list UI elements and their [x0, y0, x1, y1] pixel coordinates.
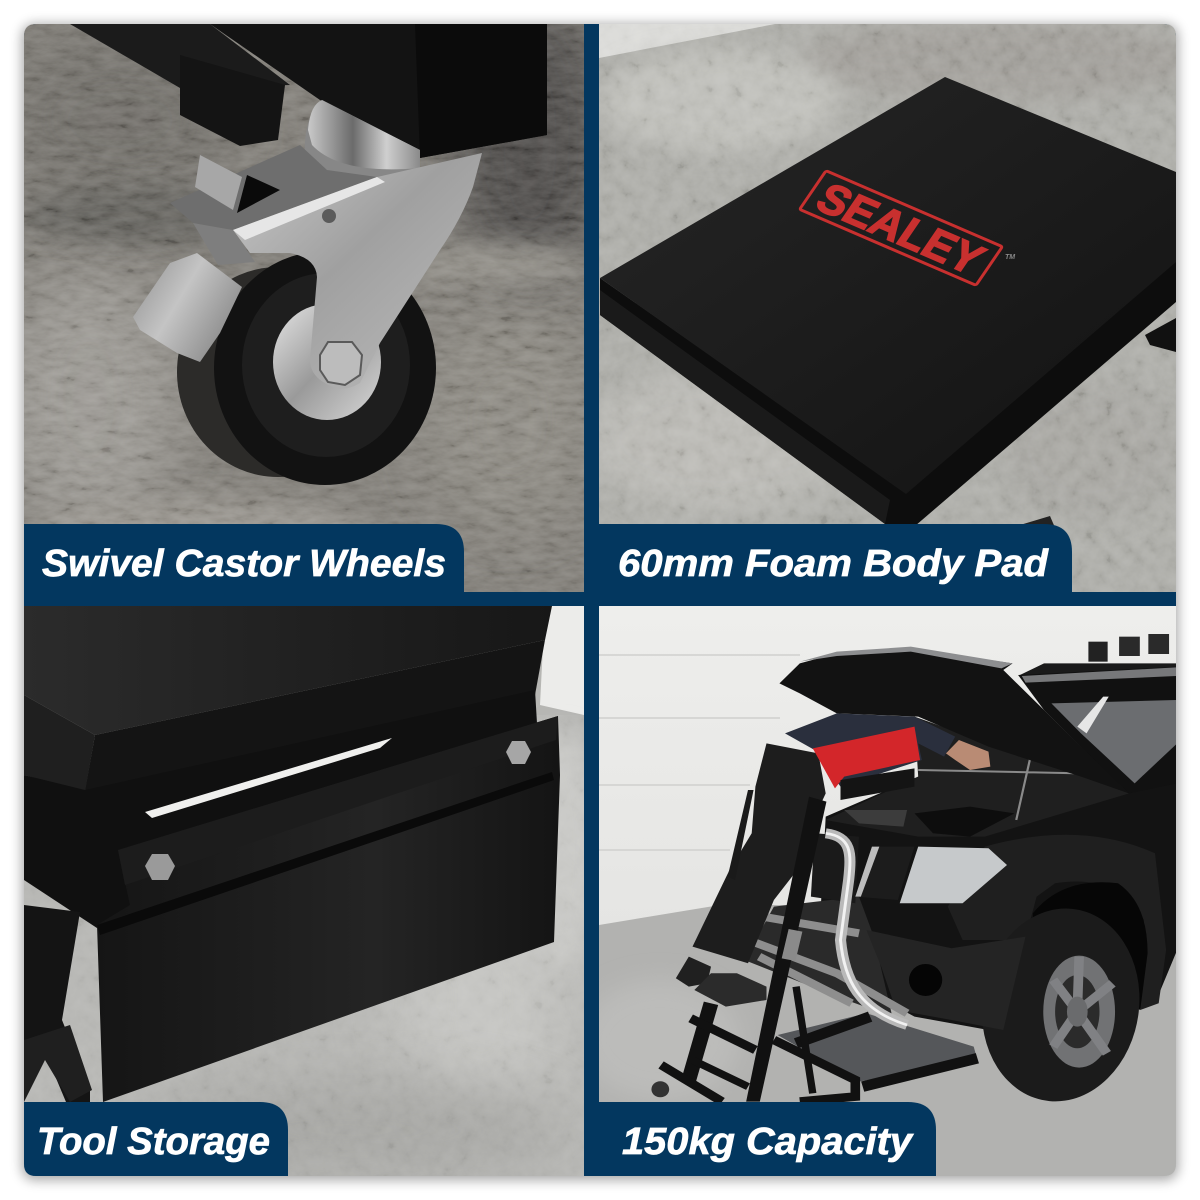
folding legs [24, 905, 92, 1102]
lower bull bar area [744, 897, 892, 1017]
pad frame and white gap [24, 690, 538, 930]
wall and floor [580, 606, 1176, 1176]
label: tool storage [24, 1102, 288, 1176]
fender [948, 835, 1166, 1010]
mechanic legs [692, 743, 826, 963]
windscreen [1051, 697, 1177, 783]
wheel bolt [320, 342, 362, 385]
nudge bar [748, 833, 907, 1025]
Sealey logo: SEALEY [807, 175, 993, 284]
roof light bar [1022, 667, 1177, 683]
mechanic arm [946, 740, 990, 770]
swivel plate [305, 100, 420, 185]
label: swivel castor wheels: Swivel Castor Wheels [42, 543, 446, 585]
open bonnet [779, 648, 1129, 793]
cabinet base [70, 24, 547, 158]
bumper [866, 930, 1026, 1030]
tyre [983, 908, 1140, 1102]
brake pedal [133, 253, 242, 362]
wheel arch [1033, 882, 1148, 1010]
bonnet highlight [800, 647, 1013, 668]
seat pad [24, 606, 552, 795]
red shirt panel [813, 727, 920, 788]
concrete floor [24, 24, 584, 592]
garage base plate [778, 1013, 977, 1087]
cabin [1018, 667, 1177, 795]
car body [818, 770, 1177, 1030]
grille [811, 833, 914, 903]
headlight [900, 847, 1007, 903]
panel: 150kg capacity [580, 606, 1177, 1176]
panel: tool storage [24, 606, 600, 1180]
trademark: TM [1005, 254, 1015, 261]
label: tool storage: Tool Storage [37, 1121, 270, 1163]
bolt left [145, 854, 175, 880]
fog lamp [909, 964, 942, 996]
castor wheel [177, 251, 436, 485]
panel: swivel castor wheels [24, 24, 584, 592]
mechanic shirt [785, 713, 955, 787]
label: foam body pad: 60mm Foam Body Pad [618, 543, 1049, 585]
roof and lamps [1020, 634, 1176, 675]
alloy wheel [1043, 956, 1115, 1068]
pad legs [1020, 318, 1176, 538]
creeper and ladder frame [651, 768, 914, 1102]
label: swivel castor wheels [24, 524, 584, 606]
floor and wall [24, 606, 600, 1180]
scene: vehicle and mechanic [651, 634, 1177, 1108]
concrete floor and wall [590, 20, 1200, 594]
label: foam body pad [584, 524, 1176, 606]
panel: foam body pad [590, 20, 1200, 594]
label: 150kg capacity: 150kg Capacity [622, 1121, 914, 1163]
storage pouch [97, 716, 560, 1102]
bolt right [506, 741, 531, 764]
fork bracket [170, 145, 482, 389]
mechanic shoes [676, 957, 766, 1007]
engine bay [826, 713, 1129, 837]
label: 150kg capacity [584, 1102, 936, 1176]
body pad [600, 77, 1176, 526]
